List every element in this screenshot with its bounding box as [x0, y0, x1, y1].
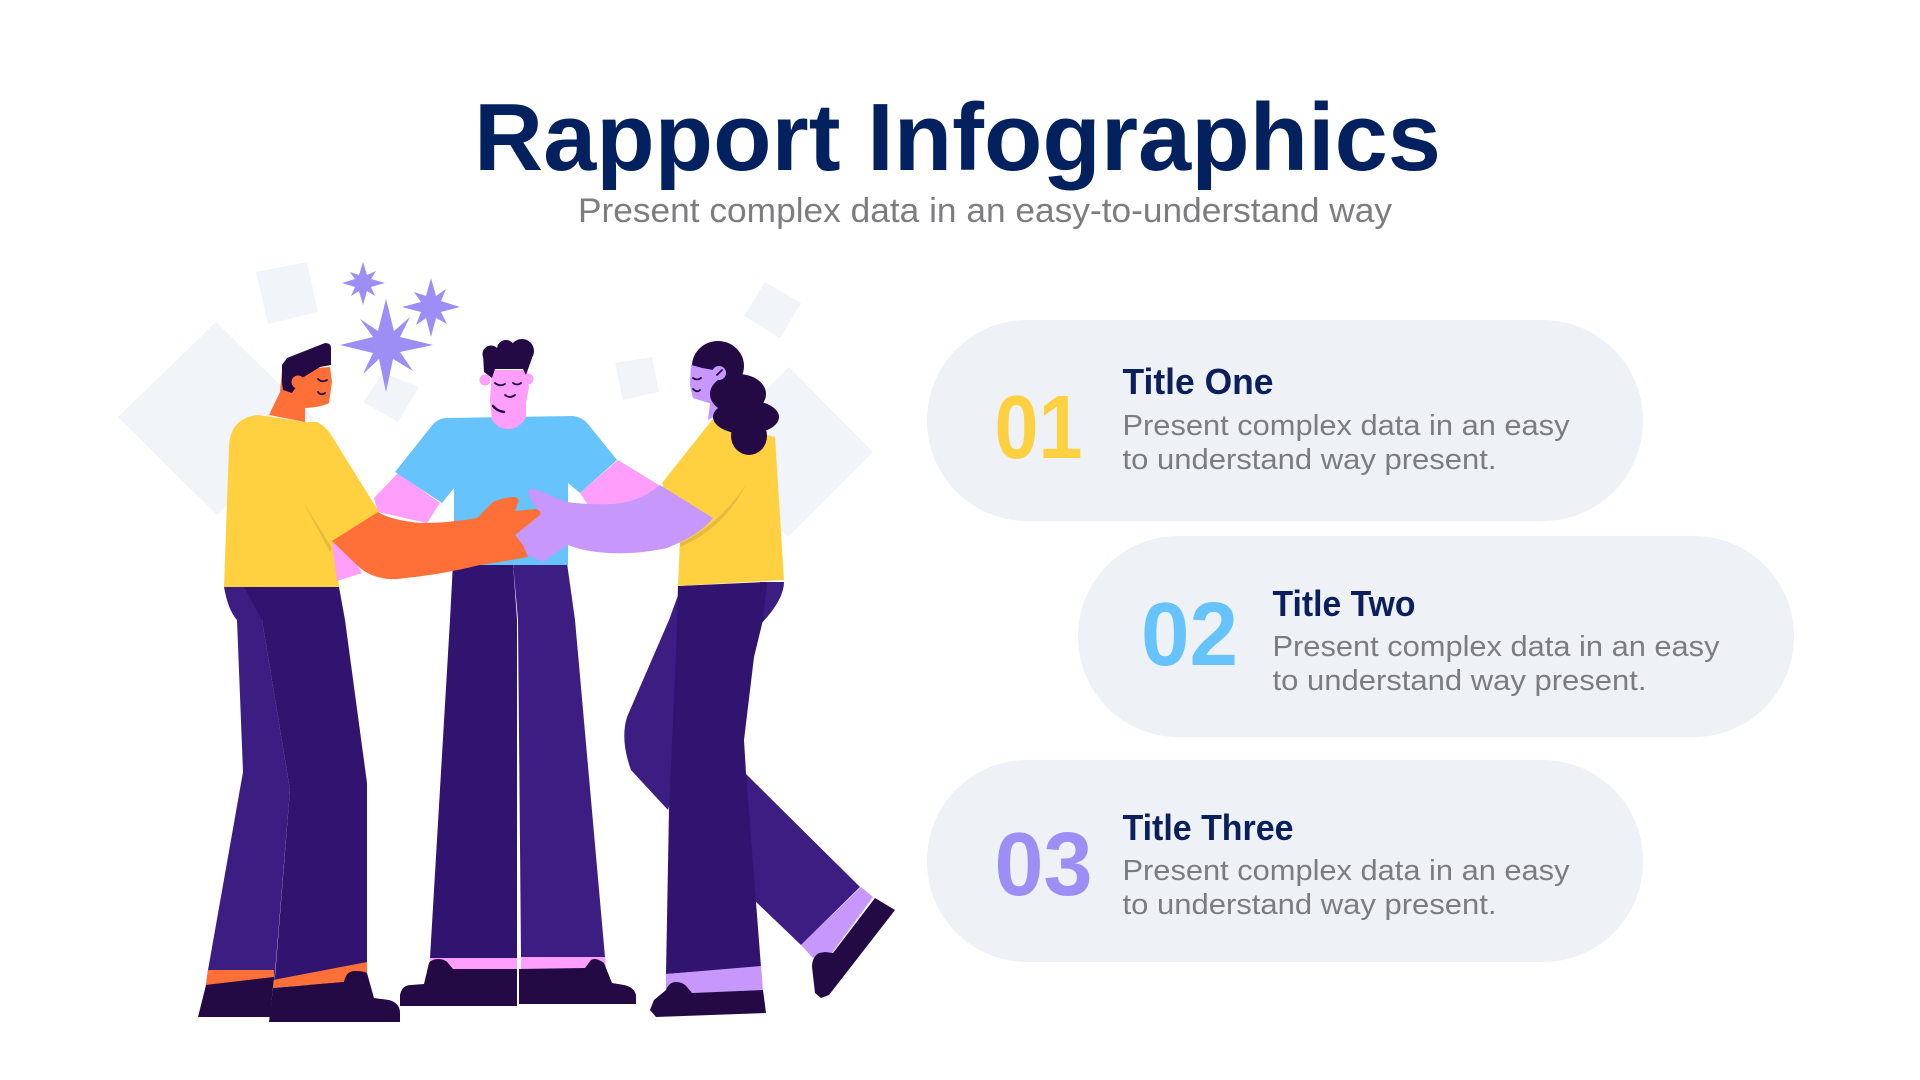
hair curls [710, 374, 779, 455]
shirt crease [302, 500, 332, 552]
description [1272, 631, 1720, 697]
shirt [224, 415, 379, 587]
description [1122, 410, 1570, 476]
arm: man's orange arm [332, 497, 540, 579]
hair top [692, 341, 744, 391]
heading: Title Three [1122, 807, 1294, 848]
person: left man [198, 343, 400, 1022]
ear [292, 376, 304, 388]
shoes [650, 898, 895, 1017]
neck and face [690, 365, 725, 420]
trouser cuffs [430, 957, 606, 970]
trouser cuffs [206, 962, 367, 988]
arm: woman's purple arm [514, 485, 713, 562]
standing leg [666, 582, 767, 974]
panel background [1078, 536, 1794, 737]
t-shirt [395, 416, 617, 565]
pink arms [332, 460, 662, 581]
neck and face [490, 370, 529, 429]
facial features [493, 383, 521, 412]
neck and face [269, 367, 332, 422]
hair [482, 339, 534, 378]
shoes [198, 971, 400, 1022]
description: to understand way present. [1122, 889, 1496, 921]
number 02: 02 [1141, 585, 1238, 685]
description: to understand way present. [1122, 444, 1496, 476]
description: to understand way present. [1272, 665, 1646, 697]
illustration: three people in a huddle [118, 262, 895, 1022]
subtitle: Present complex data in an easy-to-understand way [578, 192, 1392, 230]
heading: Title One [1122, 361, 1274, 402]
bent leg [624, 590, 700, 810]
number 03: 03 [994, 815, 1092, 915]
face fill [690, 365, 722, 404]
person: centre man [332, 339, 662, 1006]
icon: sparkle stars [340, 262, 460, 392]
trousers [206, 587, 367, 985]
facial features [693, 370, 722, 391]
hip shade [760, 582, 784, 625]
panel background [927, 320, 1643, 521]
trouser cuffs [666, 887, 873, 993]
description: Present complex data in an easy [1122, 410, 1570, 442]
panel background [927, 760, 1643, 962]
panel: item one [927, 320, 1643, 521]
description: Present complex data in an easy [1272, 631, 1720, 663]
ears [480, 374, 534, 386]
panel: item two [1078, 536, 1794, 737]
panel: item three [927, 760, 1643, 962]
background shapes [118, 262, 873, 537]
shirt crease [680, 485, 746, 547]
back leg [745, 773, 860, 945]
trousers [430, 563, 605, 958]
description: Present complex data in an easy [1122, 855, 1570, 887]
shoes [400, 959, 636, 1006]
hair [282, 343, 331, 393]
ear [712, 366, 726, 380]
shirt [662, 420, 784, 586]
person: right woman [624, 341, 895, 1017]
heading: Title Two [1272, 583, 1416, 624]
title: Rapport Infographics [474, 84, 1441, 191]
number 01: 01 [994, 378, 1082, 478]
facial features [318, 379, 327, 394]
description [1122, 855, 1570, 921]
